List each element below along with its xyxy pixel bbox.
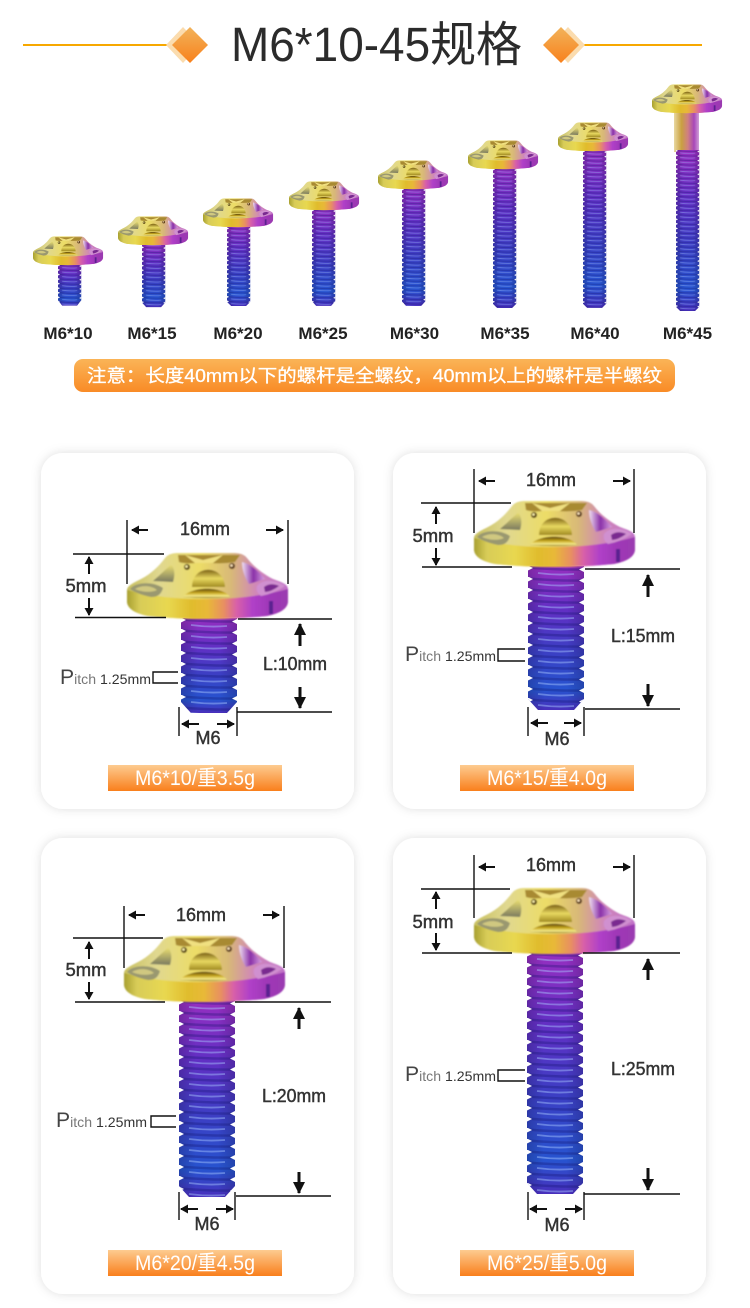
panel: M6*10 [41, 453, 354, 809]
bolt M6*10: M6*10 [43, 324, 93, 343]
size lineup of eight bolts [33, 84, 722, 343]
bolt M6*40 [558, 122, 628, 343]
weight label [460, 1250, 634, 1276]
weight label: M6*25/重5.0g [487, 1252, 607, 1275]
dimension annotations: 16mm [526, 470, 576, 490]
panel: M6*15 [393, 453, 706, 809]
dimension annotations: 5mm [412, 526, 454, 546]
dimension annotations: M6 [196, 728, 220, 748]
weight label [108, 1250, 282, 1276]
bolt M6*35: M6*35 [480, 324, 530, 343]
dimension annotations: 16mm [180, 519, 230, 539]
weight label [460, 765, 634, 791]
bolt [474, 888, 635, 1194]
weight label [108, 765, 282, 791]
title header: M6*10-45规格 [231, 19, 522, 72]
dimension annotations [60, 519, 332, 748]
bolt [474, 501, 635, 710]
dimension annotations: 16mm [526, 855, 576, 875]
dimension annotations: 16mm [176, 905, 226, 925]
dimension annotations: M6 [544, 729, 570, 749]
dimension annotations: L:15mm [611, 626, 675, 646]
dimension annotations: 5mm [66, 960, 106, 980]
dimension annotations: Pitch 1.25mm [405, 1063, 496, 1086]
dimension annotations: Pitch 1.25mm [60, 666, 151, 689]
bolt M6*15: M6*15 [127, 324, 177, 343]
weight label: M6*15/重4.0g [487, 767, 607, 790]
notice pill: 注意：长度40mm以下的螺杆是全螺纹，40mm以上的螺杆是半螺纹 [87, 366, 662, 386]
weight label: M6*20/重4.5g [135, 1252, 255, 1275]
bolt M6*15 [118, 216, 188, 343]
bolt M6*40: M6*40 [570, 324, 620, 343]
dimension annotations: Pitch 1.25mm [405, 643, 496, 666]
bolt M6*10 [33, 236, 103, 343]
bolt [127, 553, 288, 713]
bolt [124, 936, 285, 1197]
dimension annotations: L:10mm [263, 654, 327, 674]
panel: M6*25 [393, 838, 706, 1294]
bolt M6*20: M6*20 [213, 324, 263, 343]
dimension annotations [56, 905, 331, 1234]
bolt M6*35 [468, 140, 538, 343]
bolt M6*30 [378, 160, 448, 343]
title header [23, 19, 702, 72]
dimension annotations: Pitch 1.25mm [56, 1109, 147, 1132]
dimension annotations [405, 855, 680, 1235]
dimension annotations [405, 469, 680, 749]
dimension annotations: M6 [194, 1214, 220, 1234]
weight label: M6*10/重3.5g [135, 767, 255, 790]
bolt M6*45 half thread: M6*45 [663, 324, 712, 343]
bolt M6*30: M6*30 [390, 324, 439, 343]
dimension annotations: L:25mm [611, 1059, 675, 1079]
panel: M6*20 [41, 838, 354, 1294]
bolt M6*20 [203, 198, 273, 343]
dimension annotations: 5mm [412, 912, 454, 932]
notice pill [74, 359, 675, 392]
bolt M6*45 half thread [652, 84, 722, 343]
bolt M6*25: M6*25 [298, 324, 348, 343]
dimension annotations: L:20mm [262, 1086, 326, 1106]
dimension annotations: M6 [544, 1215, 570, 1235]
dimension annotations: 5mm [66, 576, 106, 596]
bolt M6*25 [289, 181, 359, 343]
